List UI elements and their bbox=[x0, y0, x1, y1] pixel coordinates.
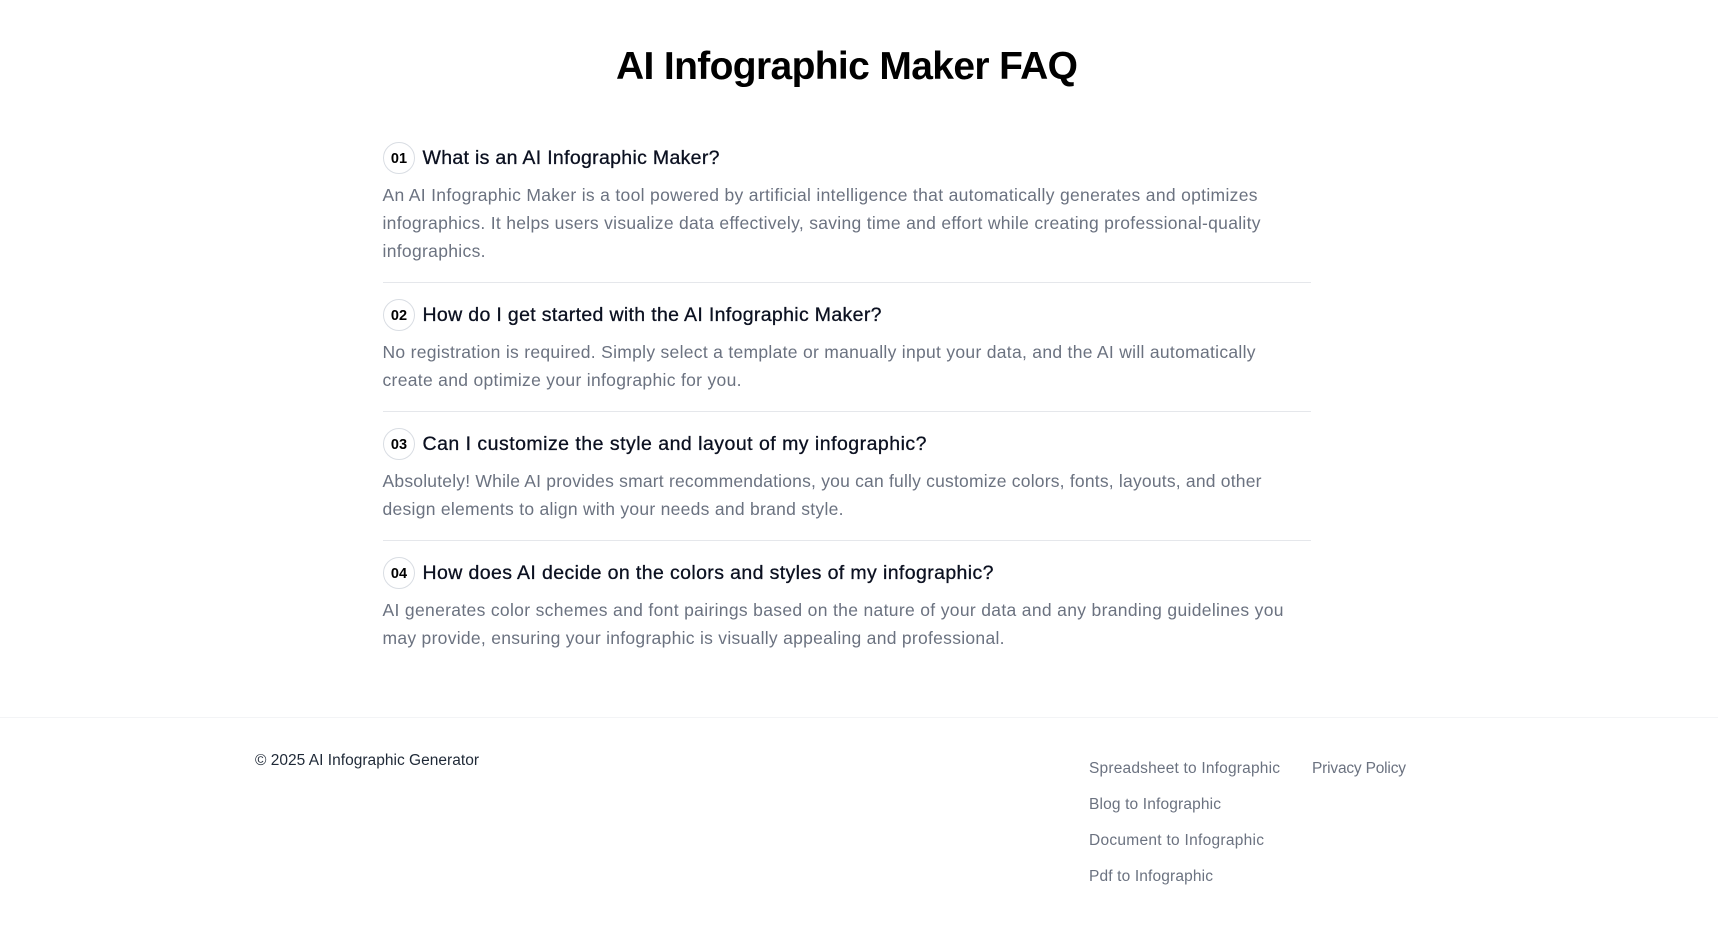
footer links: Blog to Infographic bbox=[1089, 796, 1221, 813]
question 2: How do I get started with the AI Infographic Maker? bbox=[422, 304, 882, 326]
panel: FAQ item 1 bbox=[382, 142, 1261, 261]
footer links bbox=[1089, 760, 1406, 885]
answer 4 bbox=[382, 600, 1284, 648]
answer 4: AI generates color schemes and font pairings based on the nature of your data and any branding guidelines you bbox=[382, 600, 1284, 620]
answer 4: may provide, ensuring your infographic is visually appealing and professional. bbox=[382, 628, 1004, 648]
answer 1: infographics. It helps users visualize data effectively, saving time and effort while creating professional-quality bbox=[382, 213, 1261, 233]
answer 1: An AI Infographic Maker is a tool powered by artificial intelligence that automatically generates and optimizes bbox=[382, 185, 1258, 205]
footer links: Spreadsheet to Infographic bbox=[1089, 760, 1280, 777]
number badge 03: 03 bbox=[391, 437, 407, 453]
answer 3: Absolutely! While AI provides smart recommendations, you can fully customize colors, fonts, layouts, and other bbox=[382, 471, 1262, 491]
number badge 04: 04 bbox=[391, 566, 407, 582]
answer 2: create and optimize your infographic for you. bbox=[382, 370, 742, 390]
answer 2 bbox=[382, 342, 1256, 390]
footer links: Document to Infographic bbox=[1089, 832, 1264, 849]
number badge 02: 02 bbox=[391, 308, 407, 324]
title: AI Infographic Maker FAQ bbox=[616, 45, 1078, 88]
panel: FAQ item 2 bbox=[382, 300, 1256, 390]
number badge 03 bbox=[384, 428, 414, 460]
number badge 04 bbox=[384, 558, 414, 588]
panel: FAQ item 3 bbox=[382, 428, 1262, 519]
question 4: How does AI decide on the colors and styles of my infographic? bbox=[422, 562, 994, 584]
number badge 01: 01 bbox=[391, 151, 407, 167]
question 3: Can I customize the style and layout of my infographic? bbox=[422, 433, 927, 455]
panel: FAQ item 4 bbox=[382, 558, 1284, 648]
footer links: Pdf to Infographic bbox=[1089, 868, 1213, 885]
question 1: What is an AI Infographic Maker? bbox=[422, 147, 720, 169]
answer 1 bbox=[382, 185, 1261, 261]
answer 1: infographics. bbox=[382, 241, 486, 261]
footer links: Privacy Policy bbox=[1312, 760, 1406, 777]
answer 2: No registration is required. Simply select a template or manually input your data, and the AI will automatically bbox=[382, 342, 1256, 362]
number badge 01 bbox=[384, 142, 414, 174]
answer 3 bbox=[382, 471, 1262, 519]
footer copyright: © 2025 AI Infographic Generator bbox=[255, 752, 479, 769]
answer 3: design elements to align with your needs and brand style. bbox=[382, 499, 844, 519]
number badge 02 bbox=[384, 300, 414, 330]
